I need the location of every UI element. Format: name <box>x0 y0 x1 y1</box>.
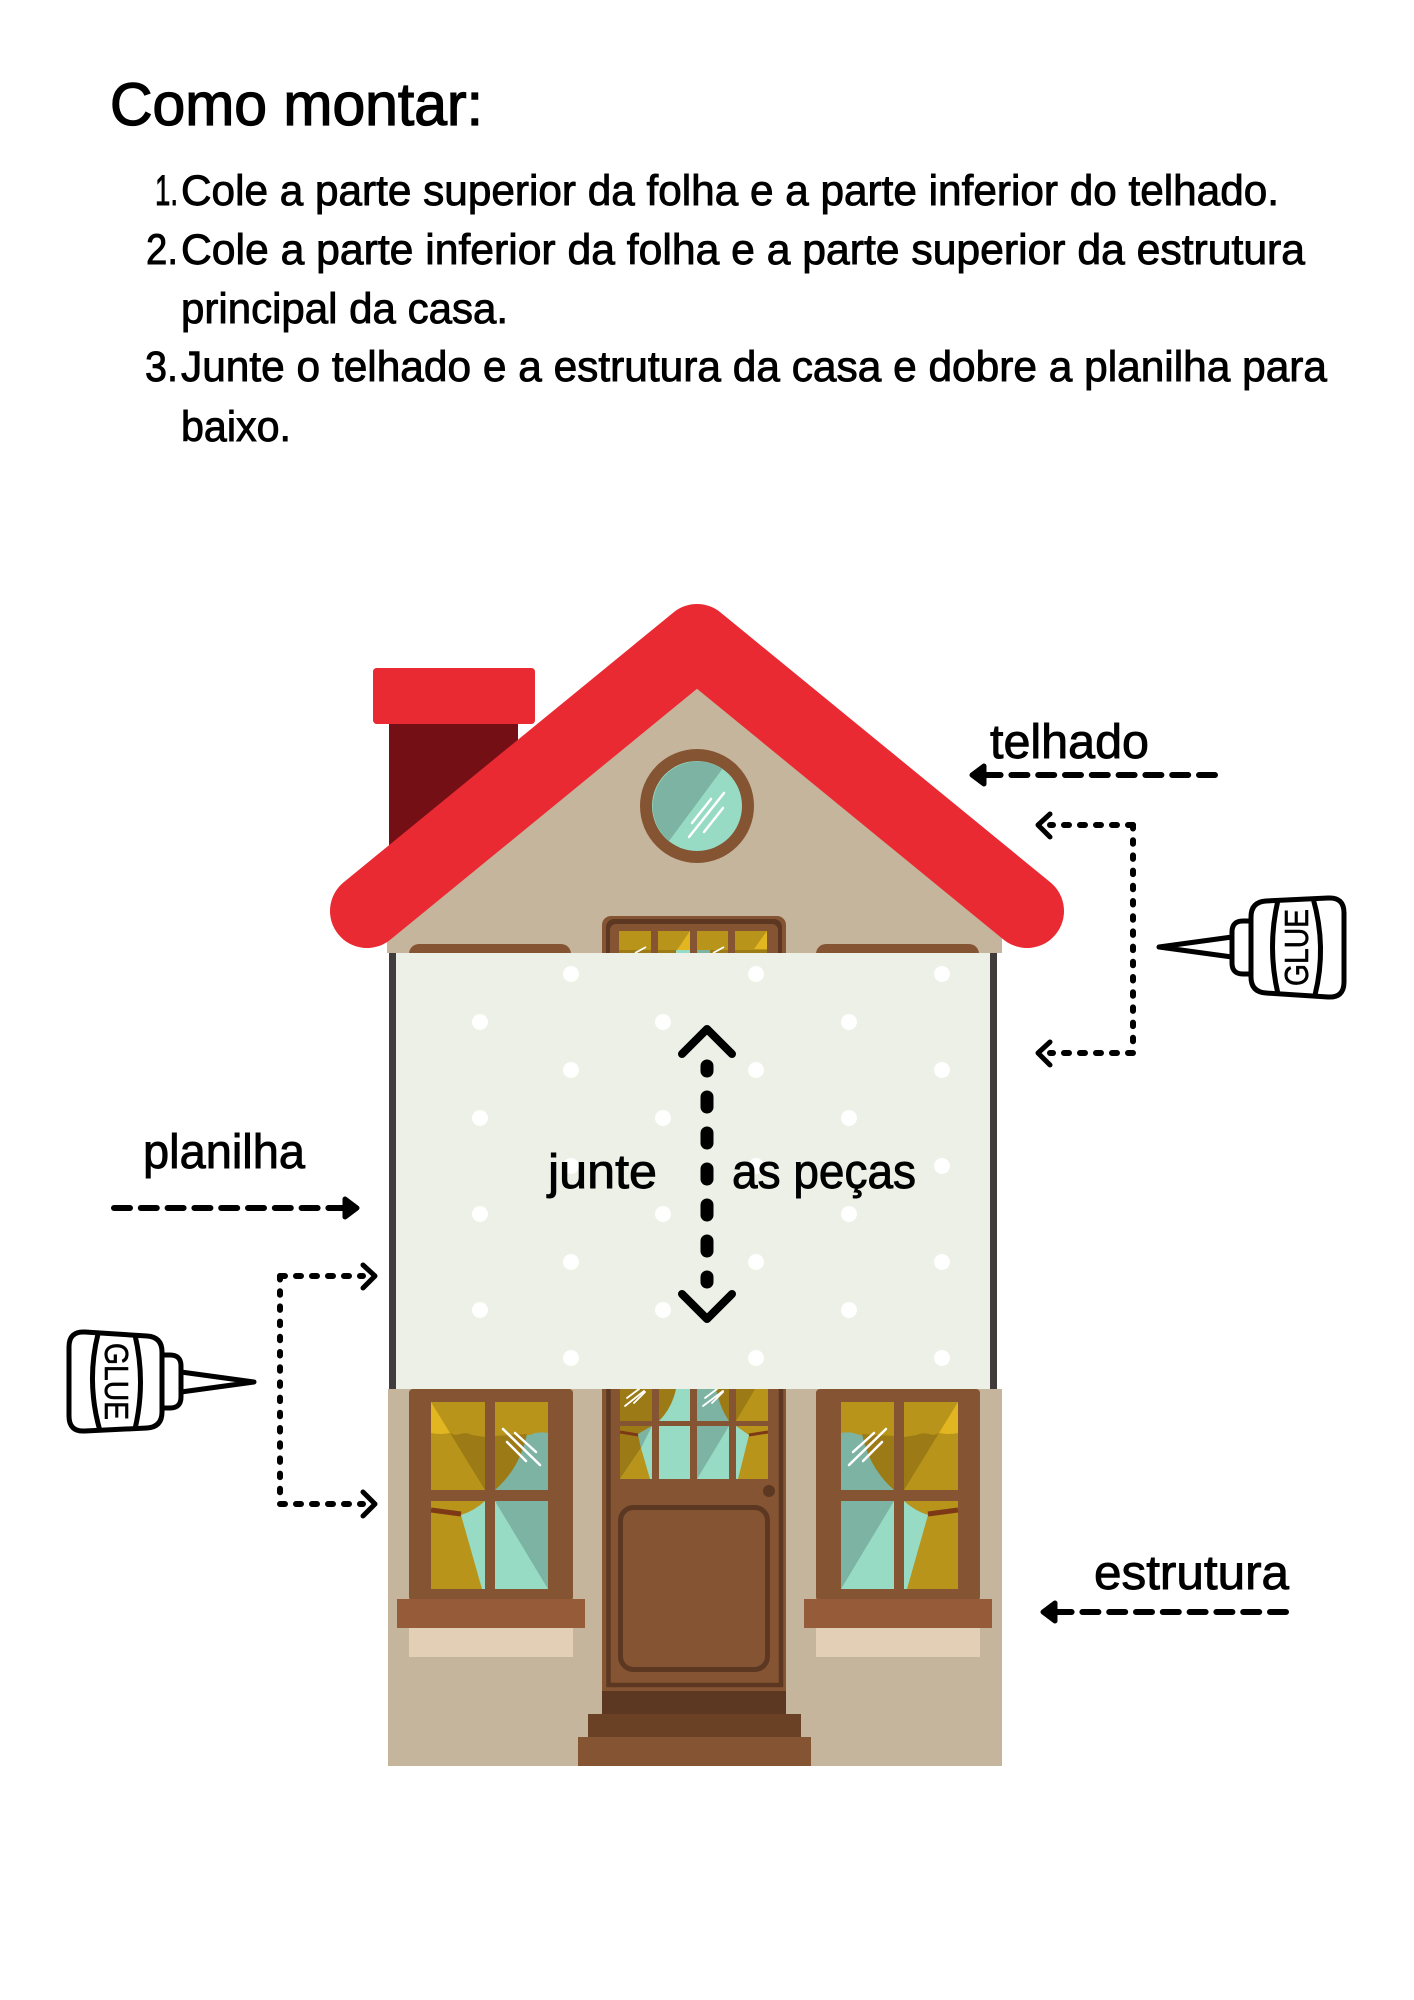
house illustration <box>367 641 1027 1766</box>
instructions list <box>145 167 1327 451</box>
step 2: principal da casa. <box>181 285 508 333</box>
dotted glue arrows: wall side <box>280 1265 375 1516</box>
left window <box>397 1389 585 1657</box>
right window <box>804 1389 992 1657</box>
arrow: telhado <box>972 766 1215 784</box>
door top peeking above sheet <box>602 916 786 974</box>
step 2: 2. <box>146 226 178 274</box>
dotted glue arrows: roof side <box>1038 814 1133 1065</box>
step 2 <box>146 226 1305 333</box>
icon: glue bottle right: GLUE <box>1278 909 1315 986</box>
upper side window tops <box>409 944 979 974</box>
step 3: Junte o telhado e a estrutura da casa e dobre a planilha para <box>181 343 1327 391</box>
gable wall <box>387 670 1002 953</box>
arrow: estrutura <box>1043 1603 1286 1621</box>
icon: glue bottle left: GLUE <box>98 1343 135 1420</box>
folded sheet panel <box>389 953 997 1389</box>
entry steps <box>578 1691 811 1766</box>
label: planilha: planilha <box>143 1126 305 1179</box>
icon: glue bottle left <box>69 1332 254 1431</box>
roof <box>367 641 1027 911</box>
double arrow: join the pieces <box>682 1029 732 1319</box>
step 1: Cole a parte superior da folha e a parte inferior do telhado. <box>181 167 1279 215</box>
label: junte: junte <box>546 1146 657 1199</box>
step 1: 1. <box>155 167 178 215</box>
chimney cap overlap <box>373 668 535 724</box>
label: estrutura: estrutura <box>1094 1547 1289 1600</box>
chimney <box>373 668 535 870</box>
label: as peças: as peças <box>732 1146 916 1199</box>
round attic window <box>640 749 754 863</box>
step 2: Cole a parte inferior da folha e a parte superior da estrutura <box>181 226 1305 274</box>
front door <box>602 1389 786 1691</box>
arrow: planilha <box>114 1199 357 1217</box>
lower structure wall <box>388 1389 1002 1766</box>
icon: glue bottle right <box>1159 898 1344 997</box>
step 3: baixo. <box>181 403 291 451</box>
step 3 <box>145 343 1327 451</box>
label: telhado: telhado <box>990 716 1149 769</box>
title: Como montar: <box>110 71 483 138</box>
step 3: 3. <box>145 343 178 391</box>
